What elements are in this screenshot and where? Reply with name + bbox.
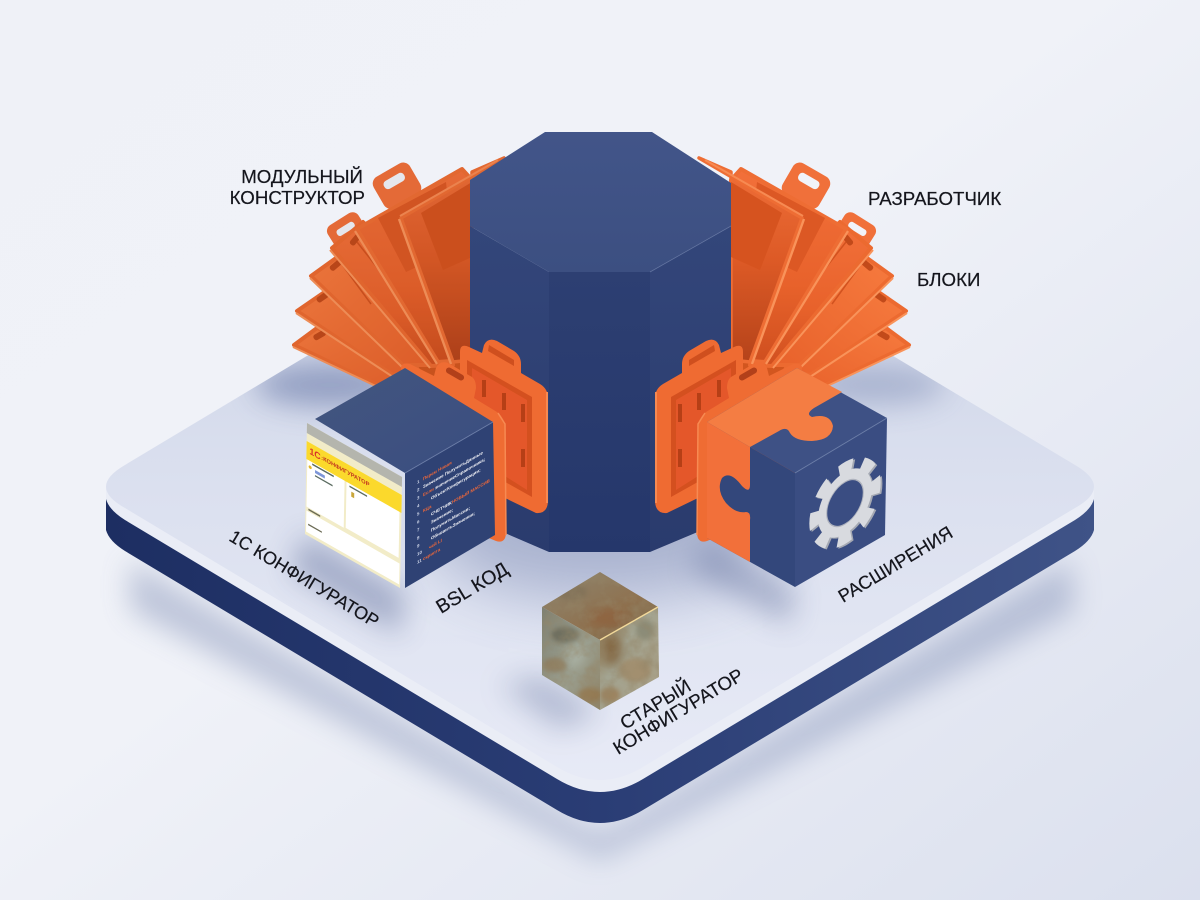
label: старый конфигуратор: СТАРЫЙ — [616, 675, 694, 733]
code lines: 8 — [417, 535, 420, 542]
rusty cube right — [600, 607, 659, 710]
label: расширения: РАСШИРЕНИЯ — [834, 522, 956, 606]
code lines: СЧЕТЧИК — [431, 500, 452, 518]
right cube: extensions puzzle — [707, 368, 887, 587]
orange puzzle piece: left — [707, 422, 750, 562]
code lines: 6 — [417, 519, 420, 526]
plate behind left cube — [401, 362, 506, 542]
central hexagonal column — [470, 132, 731, 552]
label: блоки: БЛОКИ — [917, 269, 980, 290]
configurator window: 1С — [309, 446, 321, 463]
code lines: значениеСправочника; — [435, 457, 486, 491]
cube right face with code — [405, 422, 495, 588]
platform shadow — [130, 560, 1075, 860]
code lines: ПолучитьМассив; — [431, 505, 470, 534]
code lines: 4 — [417, 503, 420, 510]
left cube: BSL code — [305, 368, 495, 588]
code lines: чей Ll — [429, 537, 442, 551]
code lines: 2 — [417, 487, 420, 494]
code lines: 10 — [417, 549, 422, 558]
code lines: Значение; — [431, 507, 453, 526]
right bracket on column — [655, 340, 743, 513]
code lines: Перем Новая — [423, 460, 452, 482]
rusty cube top — [542, 572, 658, 640]
code lines: 3 — [417, 495, 420, 502]
code lines: 9 — [417, 543, 420, 550]
label: 1С конфигуратор: 1С КОНФИГУРАТОР — [226, 526, 383, 631]
orange plate fan: right — [699, 158, 910, 388]
label: BSL код: BSL КОД — [432, 558, 512, 618]
orange plate fan: left — [293, 158, 504, 388]
platform contact shadows — [255, 363, 945, 730]
code lines: НОВЫЙ МАССИВ — [452, 476, 490, 506]
rust blotches — [543, 627, 602, 703]
code lines: скрипта — [423, 548, 441, 562]
orange puzzle piece: top — [707, 368, 842, 447]
rusty cube left — [542, 607, 600, 710]
code lines: 5 — [417, 511, 420, 518]
code lines: КЦа — [423, 504, 432, 514]
label: модульный конструктор — [230, 166, 365, 208]
label: разработчик: РАЗРАБОТЧИК — [868, 188, 1001, 209]
plate behind right cube — [697, 362, 802, 542]
label: модульный конструктор: МОДУЛЬНЫЙ — [241, 166, 363, 187]
cube left navy part — [707, 422, 795, 587]
cube right face — [795, 418, 887, 587]
configurator window — [305, 423, 402, 588]
code lines: ОбновитьЗначения; — [431, 510, 475, 542]
code lines: Значение ПолучитьДанные — [423, 450, 483, 490]
cube top face — [315, 368, 493, 473]
code lines: 7 — [417, 527, 420, 534]
code lines: ОбъектКонфигурации; — [431, 466, 481, 502]
metal texture — [544, 573, 659, 708]
platform — [106, 193, 1094, 823]
code lines — [417, 438, 490, 566]
left bracket on column — [460, 340, 548, 513]
icon: gear — [809, 440, 882, 567]
configurator window: :КОНФИГУРАТОР — [321, 455, 369, 489]
rusty metal cube — [540, 570, 662, 712]
label: модульный конструктор: КОНСТРУКТОР — [230, 187, 365, 208]
code lines: 11 — [417, 557, 422, 566]
label: старый конфигуратор: КОНФИГУРАТОР — [609, 664, 747, 758]
code lines: 1 — [417, 479, 420, 486]
cube top navy part — [707, 368, 887, 473]
code lines: Если — [423, 487, 434, 498]
